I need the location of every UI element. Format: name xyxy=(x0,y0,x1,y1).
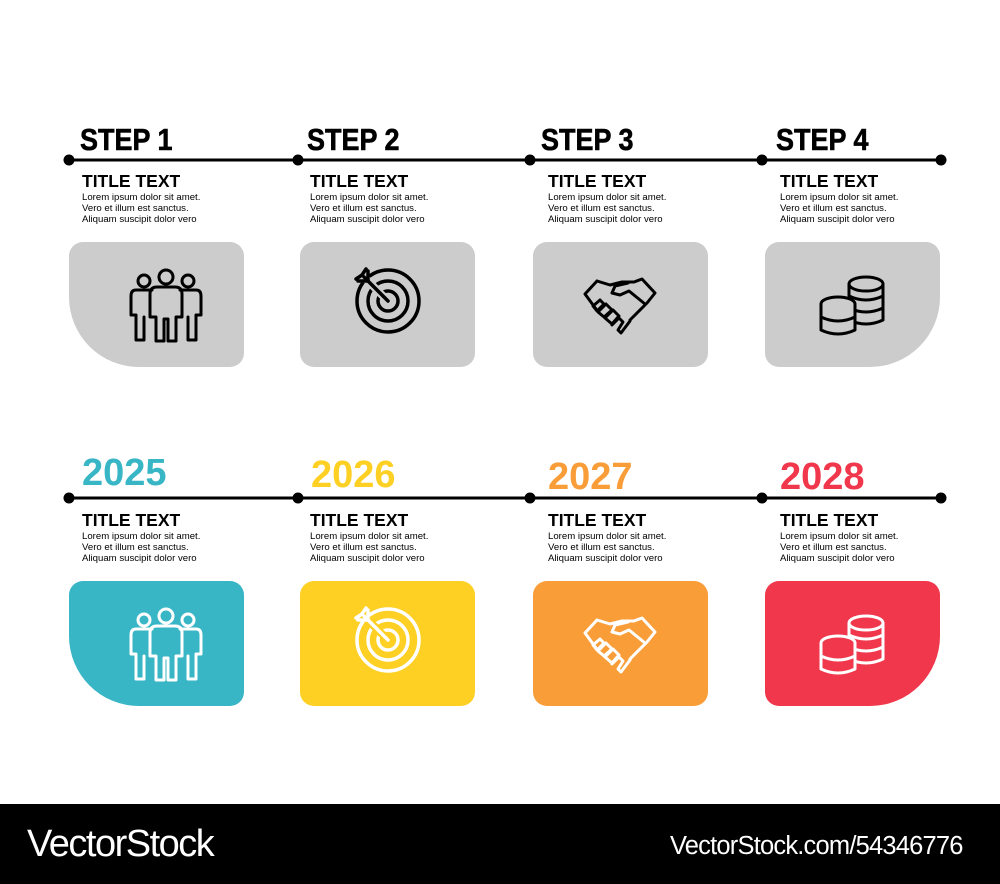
text block bottom 2: Aliquam suscipit dolor vero xyxy=(310,553,425,564)
text block bottom 3: Lorem ipsum dolor sit amet. xyxy=(548,531,666,542)
text block top 1: Vero et illum est sanctus. xyxy=(82,203,189,214)
text: STEP 3 xyxy=(541,122,633,157)
text block top 1: TITLE TEXT xyxy=(82,171,180,191)
text block bottom 1 xyxy=(82,510,200,564)
panel: 2028 box xyxy=(765,581,940,706)
icon: target bottom xyxy=(356,608,419,671)
text block top 4: TITLE TEXT xyxy=(780,171,878,191)
text block top 4: Vero et illum est sanctus. xyxy=(780,203,887,214)
footer logo: VectorStock xyxy=(27,823,213,865)
text block top 3 xyxy=(548,171,666,225)
icon: target top xyxy=(356,269,419,332)
text: 2028 xyxy=(780,456,865,498)
footer url: VectorStock.com/54346776 xyxy=(670,832,963,860)
text block top 2: Lorem ipsum dolor sit amet. xyxy=(310,192,428,203)
text block top 3: Aliquam suscipit dolor vero xyxy=(548,214,663,225)
icon: coins top xyxy=(821,277,883,334)
text block bottom 3: TITLE TEXT xyxy=(548,510,646,530)
text block bottom 1: Vero et illum est sanctus. xyxy=(82,542,189,553)
icon: handshake top xyxy=(585,279,655,333)
step labels: STEP 1 xyxy=(80,122,172,157)
text block bottom 3: Vero et illum est sanctus. xyxy=(548,542,655,553)
footer bar xyxy=(0,804,1000,884)
text block top 3: Lorem ipsum dolor sit amet. xyxy=(548,192,666,203)
text block top 2: Vero et illum est sanctus. xyxy=(310,203,417,214)
text block bottom 3 xyxy=(548,510,666,564)
text block bottom 4: Vero et illum est sanctus. xyxy=(780,542,887,553)
icon: handshake bottom xyxy=(585,618,655,672)
text block bottom 2 xyxy=(310,510,428,564)
text block bottom 1: TITLE TEXT xyxy=(82,510,180,530)
text: 2026 xyxy=(311,454,396,496)
text block bottom 4 xyxy=(780,510,898,564)
text block bottom 2: Lorem ipsum dolor sit amet. xyxy=(310,531,428,542)
icon: people bottom xyxy=(131,609,201,680)
text block top 4 xyxy=(780,171,898,225)
text block bottom 2: TITLE TEXT xyxy=(310,510,408,530)
text block bottom 4: TITLE TEXT xyxy=(780,510,878,530)
text block bottom 2: Vero et illum est sanctus. xyxy=(310,542,417,553)
text: 2027 xyxy=(548,456,633,498)
text block bottom 4: Lorem ipsum dolor sit amet. xyxy=(780,531,898,542)
panel: 2025 box xyxy=(69,581,244,706)
text block top 4: Lorem ipsum dolor sit amet. xyxy=(780,192,898,203)
icon: people top xyxy=(131,270,201,341)
year labels: 2025 xyxy=(82,452,167,494)
panel: step 3 box xyxy=(533,242,708,367)
panel: 2027 box xyxy=(533,581,708,706)
icon: coins bottom xyxy=(821,616,883,673)
text block top 1: Lorem ipsum dolor sit amet. xyxy=(82,192,200,203)
text block top 3: Vero et illum est sanctus. xyxy=(548,203,655,214)
text block top 1: Aliquam suscipit dolor vero xyxy=(82,214,197,225)
text block bottom 1: Lorem ipsum dolor sit amet. xyxy=(82,531,200,542)
text block top 3: TITLE TEXT xyxy=(548,171,646,191)
text block bottom 4: Aliquam suscipit dolor vero xyxy=(780,553,895,564)
text block top 2 xyxy=(310,171,428,225)
panel: step 1 box xyxy=(69,242,244,367)
text: STEP 2 xyxy=(307,122,399,157)
text block top 1 xyxy=(82,171,200,225)
panel: step 4 box xyxy=(765,242,940,367)
panel: 2026 box xyxy=(300,581,475,706)
text block top 2: Aliquam suscipit dolor vero xyxy=(310,214,425,225)
text block bottom 1: Aliquam suscipit dolor vero xyxy=(82,553,197,564)
text: STEP 4 xyxy=(776,122,868,157)
text block bottom 3: Aliquam suscipit dolor vero xyxy=(548,553,663,564)
text block top 4: Aliquam suscipit dolor vero xyxy=(780,214,895,225)
text block top 2: TITLE TEXT xyxy=(310,171,408,191)
panel: step 2 box xyxy=(300,242,475,367)
